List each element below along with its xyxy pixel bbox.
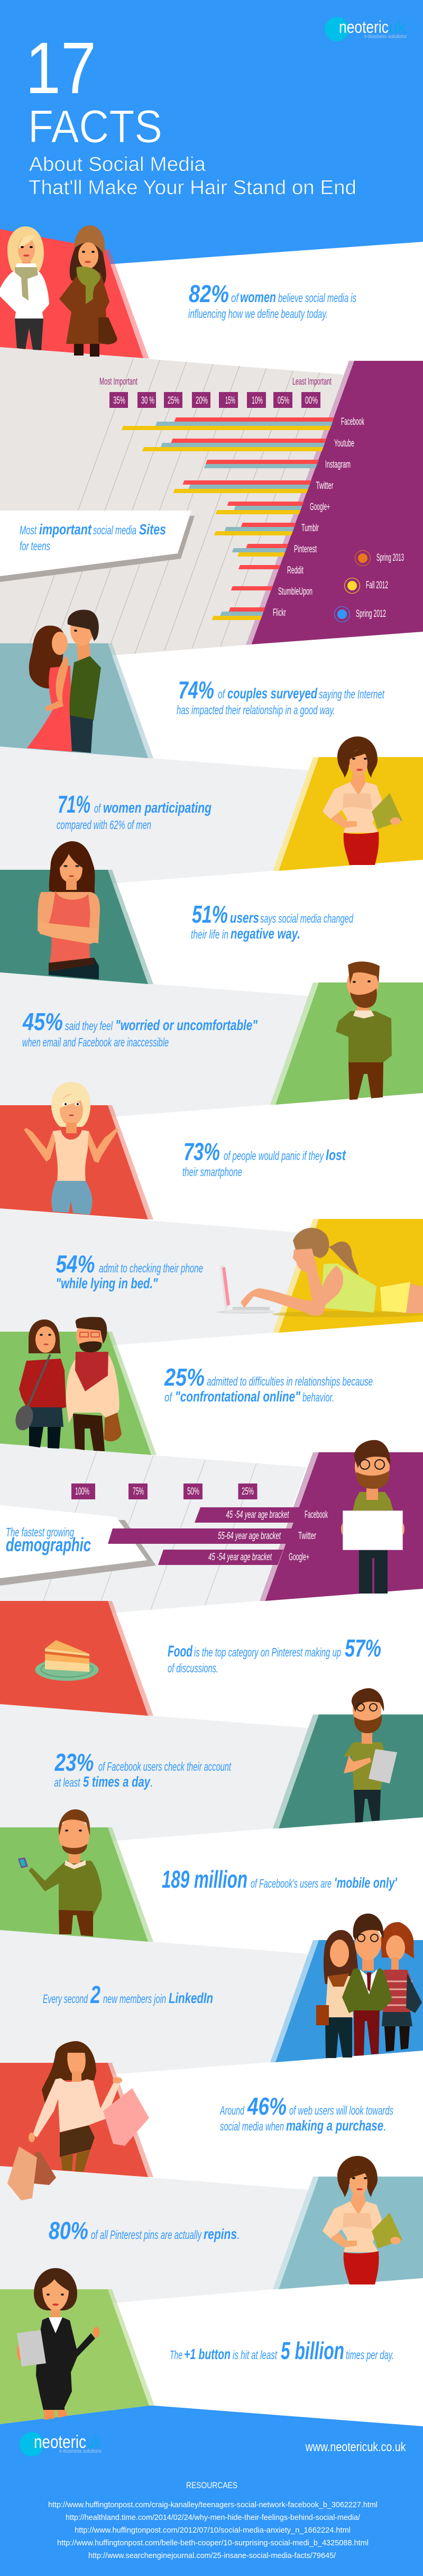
fact: plus one button: is hit at least <box>233 2348 278 2362</box>
icon: slice of cake on plate <box>35 1640 98 1681</box>
fact: 54 percent: 54% <box>56 1250 95 1278</box>
fact: 46 percent: Around <box>219 2104 245 2117</box>
fact: 71 percent: women participating <box>103 799 212 816</box>
fact: 74 percent: 74% <box>178 676 214 704</box>
fact: 46 percent: 46% <box>247 2092 287 2120</box>
fact: 45 percent: 45% <box>22 1008 63 1035</box>
panel: dark teal, angry woman <box>0 870 153 984</box>
bar: Google+ <box>158 1550 309 1565</box>
percent axis boxes: 10% <box>252 395 263 406</box>
fact: plus one button: The <box>170 2348 182 2362</box>
bar: Facebook: Facebook <box>305 1509 328 1521</box>
fact: food 57 percent: is the top category on Pinterest making up <box>194 1645 341 1659</box>
site labels: Twitter <box>316 480 334 491</box>
footer background <box>0 2406 423 2576</box>
band: bar chart section <box>0 347 344 664</box>
band: 80 percent section <box>0 2166 309 2313</box>
chart: fastest growing demographic <box>0 1451 328 1610</box>
resources list <box>48 2500 378 2560</box>
site labels: Google+ <box>310 502 330 513</box>
panel: blue, group of friends <box>270 1940 423 2062</box>
fact: 45 percent: when email and Facebook are inaccessible <box>22 1035 169 1049</box>
panel: yellow, woman with folder <box>273 757 423 871</box>
fact: 82 percent <box>188 280 356 321</box>
callout: most important social media sites for teens: Most <box>20 523 37 537</box>
fact: 54 percent: admit to checking their phone <box>99 1261 203 1275</box>
fact: food 57 percent: of discussions. <box>168 1661 218 1675</box>
fact: 46 percent: social media when <box>220 2119 284 2133</box>
bar: Google+: Google+ <box>289 1552 309 1563</box>
logo: top <box>325 17 407 41</box>
illustration: woman with folder on light teal <box>323 2156 402 2284</box>
fact: LinkedIn <box>43 1981 213 2008</box>
fact: 74 percent: couples surveyed <box>227 685 318 702</box>
panel: green, man with phone <box>0 1827 153 1942</box>
fact: plus one button: +1 button <box>184 2346 231 2362</box>
fact: 51 percent <box>191 900 354 942</box>
fact: 25 percent: "confrontational online" <box>175 1388 301 1405</box>
bar: Google+: 45 -54 year age bracket <box>208 1552 272 1563</box>
fact: 51 percent: their life in <box>191 927 228 941</box>
site labels: Tumblr <box>301 523 319 534</box>
fact: 82 percent: influencing how we define beauty today. <box>188 307 328 321</box>
fact: 54 percent: "while lying in bed." <box>56 1275 158 1291</box>
fact: 82 percent: of <box>231 291 240 305</box>
fact: 23 percent: at least <box>54 1776 81 1789</box>
title: About Social Media <box>29 153 206 176</box>
band: 45 percent section <box>0 972 309 1127</box>
fact: 71 percent <box>57 790 212 832</box>
bar: Twitter <box>108 1528 316 1544</box>
fact: 71 percent: compared with 62% of men <box>57 818 151 832</box>
illustration: woman with folder on yellow <box>323 736 402 865</box>
fact: 189 million: of Facebook's users are <box>251 1877 332 1890</box>
band: LinkedIn section <box>0 1930 309 2083</box>
fact: 82 percent: women <box>240 289 276 305</box>
logo: footer: uk <box>86 2432 102 2452</box>
panel: yellow, lying girl <box>273 1219 423 1333</box>
resources list: http://www.searchenginejournal.com/25-insane-social-media-facts/79645/ <box>88 2551 336 2560</box>
fact: 25 percent: 25% <box>164 1363 205 1391</box>
illustration: two women in winter clothes <box>0 225 117 357</box>
percent axis boxes: 25% <box>168 395 179 406</box>
fact: 51 percent: negative way. <box>231 925 300 942</box>
fact: LinkedIn: LinkedIn <box>169 1990 213 2006</box>
band: demographic section <box>0 1443 306 1622</box>
fact: food 57 percent <box>168 1634 381 1675</box>
fact: 80 percent: of all Pinterest pins are actually <box>91 2228 202 2242</box>
fact: 189 million <box>162 1865 398 1893</box>
band: 71 percent section <box>0 747 308 894</box>
site labels: Instagram <box>325 459 351 470</box>
percent axis boxes: 75% <box>133 1486 144 1497</box>
fact: 73 percent: their smartphone <box>182 1165 242 1179</box>
fact: 73 percent <box>182 1137 346 1179</box>
resources list: http://healthland.time.com/2014/02/24/why-men-hide-their-feelings-behind-social-media/ <box>66 2513 361 2522</box>
callout: most important social media sites for teens: important <box>39 521 92 538</box>
fact: 82 percent: 82% <box>189 280 229 307</box>
fact: 51 percent: 51% <box>192 900 228 928</box>
panel: purple chart side <box>246 361 423 645</box>
panel: red, shopper <box>0 2063 153 2177</box>
illustration: arguing couple <box>13 1317 122 1451</box>
fact: 23 percent: of Facebook users check their account <box>98 1760 232 1773</box>
fact: 71 percent: of <box>94 802 102 815</box>
illustration: shrugging blonde woman <box>24 1082 118 1215</box>
fact: 80 percent: repins <box>204 2226 237 2242</box>
percent axis boxes <box>109 392 320 408</box>
fact: 80 percent <box>49 2217 240 2244</box>
fact: 74 percent: has impacted their relationship in a good way. <box>177 703 335 717</box>
logo: top: e-business solutions <box>364 34 407 40</box>
resources list: http://www.huffingtonpost.com/2012/07/10/social-media-anxiety_n_1662224.html <box>75 2526 351 2535</box>
fact: 51 percent: says social media changed <box>260 912 354 925</box>
panel: purple, demographic side <box>260 1452 423 1601</box>
fact: food 57 percent: 57% <box>345 1634 381 1662</box>
fact: plus one button: times per day. <box>346 2348 394 2362</box>
header background <box>0 0 423 265</box>
site labels: Youtube <box>334 438 354 449</box>
panel: dark teal, man with tablet <box>273 1714 423 1828</box>
fact: 74 percent: saying the Internet <box>319 687 385 701</box>
site labels: Flickr <box>273 607 286 618</box>
panel: green, arguing couple <box>0 1332 157 1455</box>
legend: Fall 2012 <box>366 580 388 591</box>
fact: 45 percent: said they feel <box>65 1019 113 1033</box>
percent axis boxes: 30 % <box>141 395 154 406</box>
percent axis boxes: 100% <box>75 1486 89 1497</box>
illustration: thinking bearded man <box>336 961 392 1100</box>
site labels: Reddit <box>287 565 304 576</box>
illustration: man with tablet <box>344 1688 397 1823</box>
logo: footer <box>20 2432 102 2456</box>
legend <box>334 550 404 622</box>
fact: 189 million: 189 million <box>162 1865 247 1893</box>
fact: 73 percent: 73% <box>183 1137 220 1165</box>
fact: 25 percent <box>164 1363 373 1405</box>
fact: LinkedIn: 2 <box>90 1981 100 2008</box>
fact: 46 percent <box>219 2092 393 2134</box>
illustration: girl lying with laptop <box>217 1228 423 1317</box>
bar: Twitter: 55-64 year age bracket <box>218 1531 281 1542</box>
percent axis boxes: 25% <box>242 1486 254 1497</box>
panel: teal, couple <box>0 643 153 758</box>
bars: spring 2012 <box>122 426 331 620</box>
illustration: bearded man with phone <box>18 1809 102 1936</box>
fact: 82 percent: believe social media is <box>278 291 356 305</box>
fact: LinkedIn: Every second <box>43 1992 88 2006</box>
percent axis boxes: 50% <box>187 1486 199 1497</box>
illustration: embracing couple <box>27 609 101 753</box>
illustration: glasses man holding blank sign <box>341 1440 404 1594</box>
resources list: http://www.huffingtonpost.com/craig-kanalley/teenagers-social-network-facebook_b_3062227.html <box>48 2500 378 2509</box>
fact: plus one button <box>170 2337 394 2364</box>
percent axis boxes: 35% <box>113 395 125 406</box>
callout: the fastest growing demographic <box>0 1505 156 1586</box>
fact: 23 percent: . <box>150 1776 153 1789</box>
fact: 80 percent: . <box>237 2228 240 2242</box>
resources heading: RESOURCAES <box>186 2480 237 2490</box>
callout: most important social media sites for teens: for teens <box>20 539 50 553</box>
callout: the fastest growing demographic: The fastest growing <box>6 1525 74 1539</box>
resources list: http://www.huffingtonpost.com/belle-beth-cooper/10-surprising-social-medi_b_4325088.html <box>57 2538 369 2547</box>
fact: 23 percent <box>54 1749 232 1790</box>
percent axis boxes: 05% <box>278 395 289 406</box>
title: FACTS <box>28 101 162 152</box>
logo: top: neoteric <box>339 17 389 37</box>
fact: 74 percent <box>177 676 385 717</box>
bar: Facebook: 45 -54 year age bracket <box>226 1509 289 1521</box>
panel: red, food <box>0 1601 153 1716</box>
panel: light green, businesswoman <box>0 2289 154 2424</box>
title <box>25 28 356 199</box>
fact: 54 percent <box>56 1250 203 1291</box>
site labels: Pinterest <box>294 544 317 555</box>
panel: red, two women <box>0 229 149 359</box>
fact: 73 percent: of people would panic if they <box>224 1149 324 1163</box>
site labels: StumbleUpon <box>278 586 312 597</box>
fact: 46 percent: . <box>383 2119 387 2133</box>
band: 23 percent section <box>0 1704 309 1850</box>
fact: 74 percent: of <box>218 687 226 701</box>
fact: 71 percent: 71% <box>58 790 90 818</box>
bar: Facebook <box>195 1507 328 1523</box>
percent axis boxes <box>71 1483 257 1499</box>
panel: green, thinking man <box>270 982 423 1105</box>
site labels: Facebook <box>341 416 364 427</box>
bars: fall 2012 <box>155 422 333 616</box>
illustration: group of three friends <box>316 1914 422 2058</box>
percent axis boxes: 20% <box>196 395 208 406</box>
percent axis boxes: 15% <box>225 395 235 406</box>
panel: red, shrugging woman <box>0 1105 153 1219</box>
fact: 46 percent: making a purchase <box>286 2117 383 2134</box>
illustration: angry woman with crossed arms <box>38 841 100 979</box>
title: 17 <box>25 28 96 109</box>
logo: top: uk <box>389 17 407 37</box>
callout: most important social media sites for teens <box>0 511 195 582</box>
chart heading: least important: Least Important <box>292 376 332 387</box>
callout: most important social media sites for teens: Sites <box>139 521 166 538</box>
fact: 45 percent <box>22 1008 258 1049</box>
bars: spring 2013 <box>171 417 334 612</box>
fact: LinkedIn: new members join <box>103 1992 166 2006</box>
fact: 45 percent: "worried or uncomfortable" <box>115 1017 258 1033</box>
fact: 189 million: 'mobile only' <box>334 1874 398 1891</box>
fact: 80 percent: 80% <box>49 2217 88 2244</box>
fact: 23 percent: 23% <box>54 1749 94 1776</box>
title: That'll Make Your Hair Stand on End <box>29 177 356 199</box>
fact: 51 percent: users <box>230 909 259 926</box>
logo: footer: neoteric <box>34 2432 86 2452</box>
callout: the fastest growing demographic: demographic <box>6 1534 91 1555</box>
logo: footer: e-business solutions <box>59 2448 102 2454</box>
fact: plus one button: 5 billion <box>281 2337 344 2364</box>
fact: 25 percent: behavior. <box>302 1390 334 1404</box>
fact: food 57 percent: Food <box>168 1643 192 1660</box>
band: 54 percent section <box>0 1208 309 1354</box>
panel: light teal, woman with folder <box>273 2177 423 2289</box>
chart: most important social media sites for teens <box>30 358 404 654</box>
chart heading: most important: Most Important <box>99 376 137 387</box>
illustration: woman with shopping bags <box>7 2041 149 2200</box>
callout: most important social media sites for teens: social media <box>93 523 136 537</box>
illustration: businesswoman with tablet <box>17 2268 99 2420</box>
fact: 25 percent: of <box>164 1390 173 1404</box>
bar: Twitter: Twitter <box>298 1531 316 1542</box>
percent axis boxes: 00% <box>305 395 318 406</box>
fact: 23 percent: 5 times a day <box>83 1773 151 1790</box>
legend: Spring 2012 <box>356 608 386 620</box>
site labels <box>273 416 364 618</box>
fact: 73 percent: lost <box>326 1147 346 1163</box>
